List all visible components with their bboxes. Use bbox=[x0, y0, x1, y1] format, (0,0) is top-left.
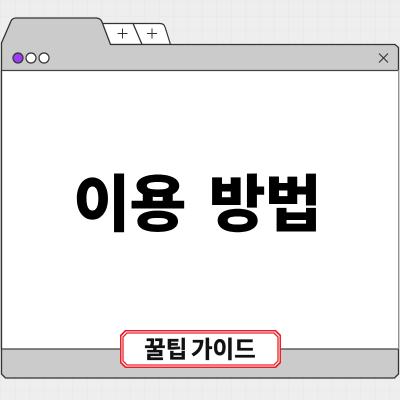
tab: second small tab bbox=[133, 24, 170, 44]
title: 이용 방법 bbox=[73, 171, 321, 240]
tab: first small tab bbox=[100, 24, 142, 44]
badge label: 꿀팁 가이드 bbox=[144, 336, 256, 362]
icon: close bbox=[379, 54, 388, 62]
content area bbox=[2, 70, 398, 349]
badge bbox=[120, 330, 281, 368]
window control dots bbox=[13, 53, 49, 63]
